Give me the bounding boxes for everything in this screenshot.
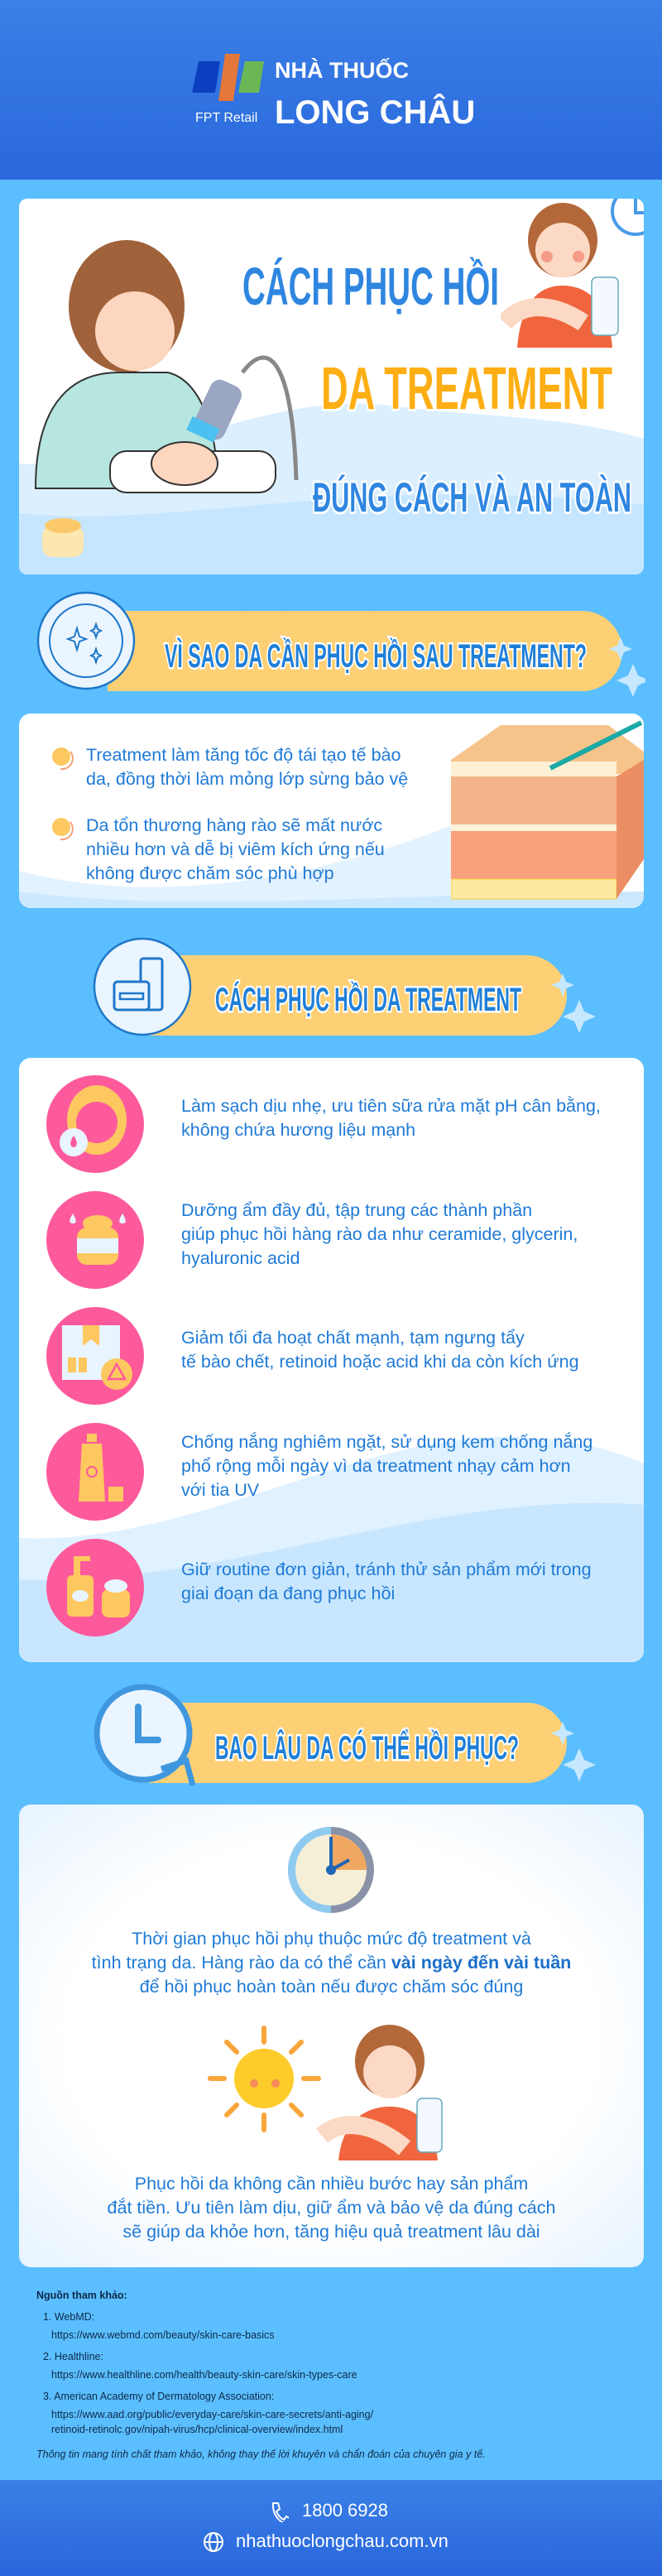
section header 2: [93, 937, 596, 1036]
text: recovery duration: [91, 1929, 571, 1997]
text: conclusion: đắt tiền. Ưu tiên làm dịu, giữ ẩm và bảo vệ da đúng cách: [108, 2198, 555, 2218]
text: recovery duration: để hồi phục hoàn toàn nếu được chăm sóc đúng: [140, 1977, 523, 1997]
references: https://www.webmd.com/beauty/skin-care-basics: [51, 2329, 275, 2341]
subtitle: khiến da dễ tổn thương nếu không được phục hồi đúng: [100, 639, 562, 658]
logo: [192, 54, 475, 131]
bullet 1: Treatment làm tăng tốc độ tái tạo tế bào: [86, 745, 401, 765]
illustration: skin layers: [451, 720, 644, 899]
references: Thông tin mang tính chất tham khảo, không thay thế lời khuyên và chẩn đoán của chuyên gia y tế.: [36, 2449, 486, 2460]
section header 1: [36, 591, 645, 697]
icon: clock: [94, 1684, 195, 1786]
bullet 2: nhiều hơn và dễ bị viêm kích ứng nếu: [86, 839, 385, 859]
step 5: [46, 1539, 592, 1636]
references: retinoid-retinolc.gov/nipah-virus/hcp/clinical-overview/index.html: [51, 2424, 343, 2435]
step 2: giúp phục hồi hàng rào da như ceramide, glycerin,: [181, 1224, 578, 1244]
subtitle: Treatment giúp cải thiện mụn, thâm, lão hóa nhưng cũng: [96, 611, 566, 630]
heading: [163, 636, 645, 697]
references: [36, 2290, 486, 2460]
references: 2. Healthline:: [43, 2351, 103, 2362]
text: recovery duration: Thời gian phục hồi phụ thuộc mức độ treatment và: [132, 1929, 531, 1949]
text: conclusion: [108, 2174, 555, 2242]
step 1: không chứa hương liệu mạnh: [181, 1120, 415, 1140]
logo text brand: NHÀ THUỐC: [275, 58, 409, 83]
hero card: [19, 199, 644, 574]
references: https://www.healthline.com/health/beauty-skin-care/skin-types-care: [51, 2369, 357, 2381]
logo text FPT Retail: FPT Retail: [195, 111, 257, 125]
card: recovery time: [19, 1805, 644, 2267]
text: conclusion: Phục hồi da không cần nhiều bước hay sản phẩm: [135, 2174, 528, 2194]
bullet 1: [52, 745, 408, 789]
logo: LONG CHÂU: [275, 94, 475, 131]
footer: [0, 2480, 662, 2576]
step 5: giai đoạn da đang phục hồi: [181, 1584, 395, 1603]
illustration: nurse with device: [35, 240, 298, 493]
contact: website: nhathuoclongchau.com.vn: [236, 2530, 449, 2551]
icon: FPT logo: [192, 54, 264, 101]
step 1: Làm sạch dịu nhẹ, ưu tiên sữa rửa mặt pH cân bằng,: [181, 1096, 601, 1116]
pill: [149, 955, 567, 1036]
step 2: Dưỡng ẩm đầy đủ, tập trung các thành phần: [181, 1200, 532, 1220]
heading: [215, 1722, 596, 1781]
step 4: với tia UV: [181, 1480, 259, 1500]
step 3: tế bào chết, retinoid hoặc acid khi da còn kích ứng: [181, 1352, 579, 1372]
pill: [108, 611, 622, 691]
bullet 1: da, đồng thời làm mỏng lớp sừng bảo vệ: [86, 769, 408, 789]
contact: phone: 1800 6928: [302, 2500, 388, 2521]
references: 1. WebMD:: [43, 2311, 94, 2323]
contact: phone: [271, 2500, 388, 2522]
bullet 2: [52, 815, 385, 883]
step 5: Giữ routine đơn giản, tránh thử sản phẩm mới trong: [181, 1560, 592, 1579]
step 3: Giảm tối đa hoạt chất mạnh, tạm ngưng tẩy: [181, 1328, 525, 1348]
text: conclusion: sẽ giúp da khỏe hơn, tăng hiệu quả treatment lâu dài: [122, 2222, 540, 2242]
bullet 2: Da tổn thương hàng rào sẽ mất nước: [86, 815, 382, 835]
section header 3: [94, 1684, 596, 1786]
card: why: [19, 714, 644, 908]
text: recovery duration: tình trạng da. Hàng rào da có thể cần vài ngày đến vài tuần: [92, 1953, 571, 1973]
illustration: woman applying cream: [501, 203, 619, 348]
step 4: [46, 1423, 592, 1521]
references: 3. American Academy of Dermatology Association:: [43, 2391, 274, 2402]
illustration: sun and woman: [208, 2025, 443, 2160]
references: Nguồn tham khảo:: [36, 2290, 127, 2301]
card: steps: [19, 1058, 644, 1662]
bullet 2: không được chăm sóc phù hợp: [86, 863, 334, 883]
pill: [149, 1703, 567, 1783]
references: https://www.aad.org/public/everyday-care/skin-care-secrets/anti-aging/: [51, 2409, 373, 2420]
icon: refresh circle: [36, 591, 136, 690]
title: [242, 257, 631, 521]
icon: clock quarter: [288, 1827, 374, 1913]
subtitle: [96, 611, 566, 658]
heading: [215, 973, 596, 1033]
step 3: [46, 1307, 579, 1405]
step 2: [46, 1191, 578, 1289]
icon: products: [93, 937, 192, 1036]
icon: cream jar: [42, 518, 84, 557]
icon: clock refresh: [611, 199, 644, 236]
step 4: Chống nắng nghiêm ngặt, sử dụng kem chống nắng: [181, 1432, 592, 1452]
header bar: [0, 0, 662, 180]
step 2: hyaluronic acid: [181, 1248, 300, 1268]
step 4: phổ rộng mỗi ngày vì da treatment nhạy cảm hơn: [181, 1456, 571, 1476]
step 1: [46, 1075, 601, 1173]
